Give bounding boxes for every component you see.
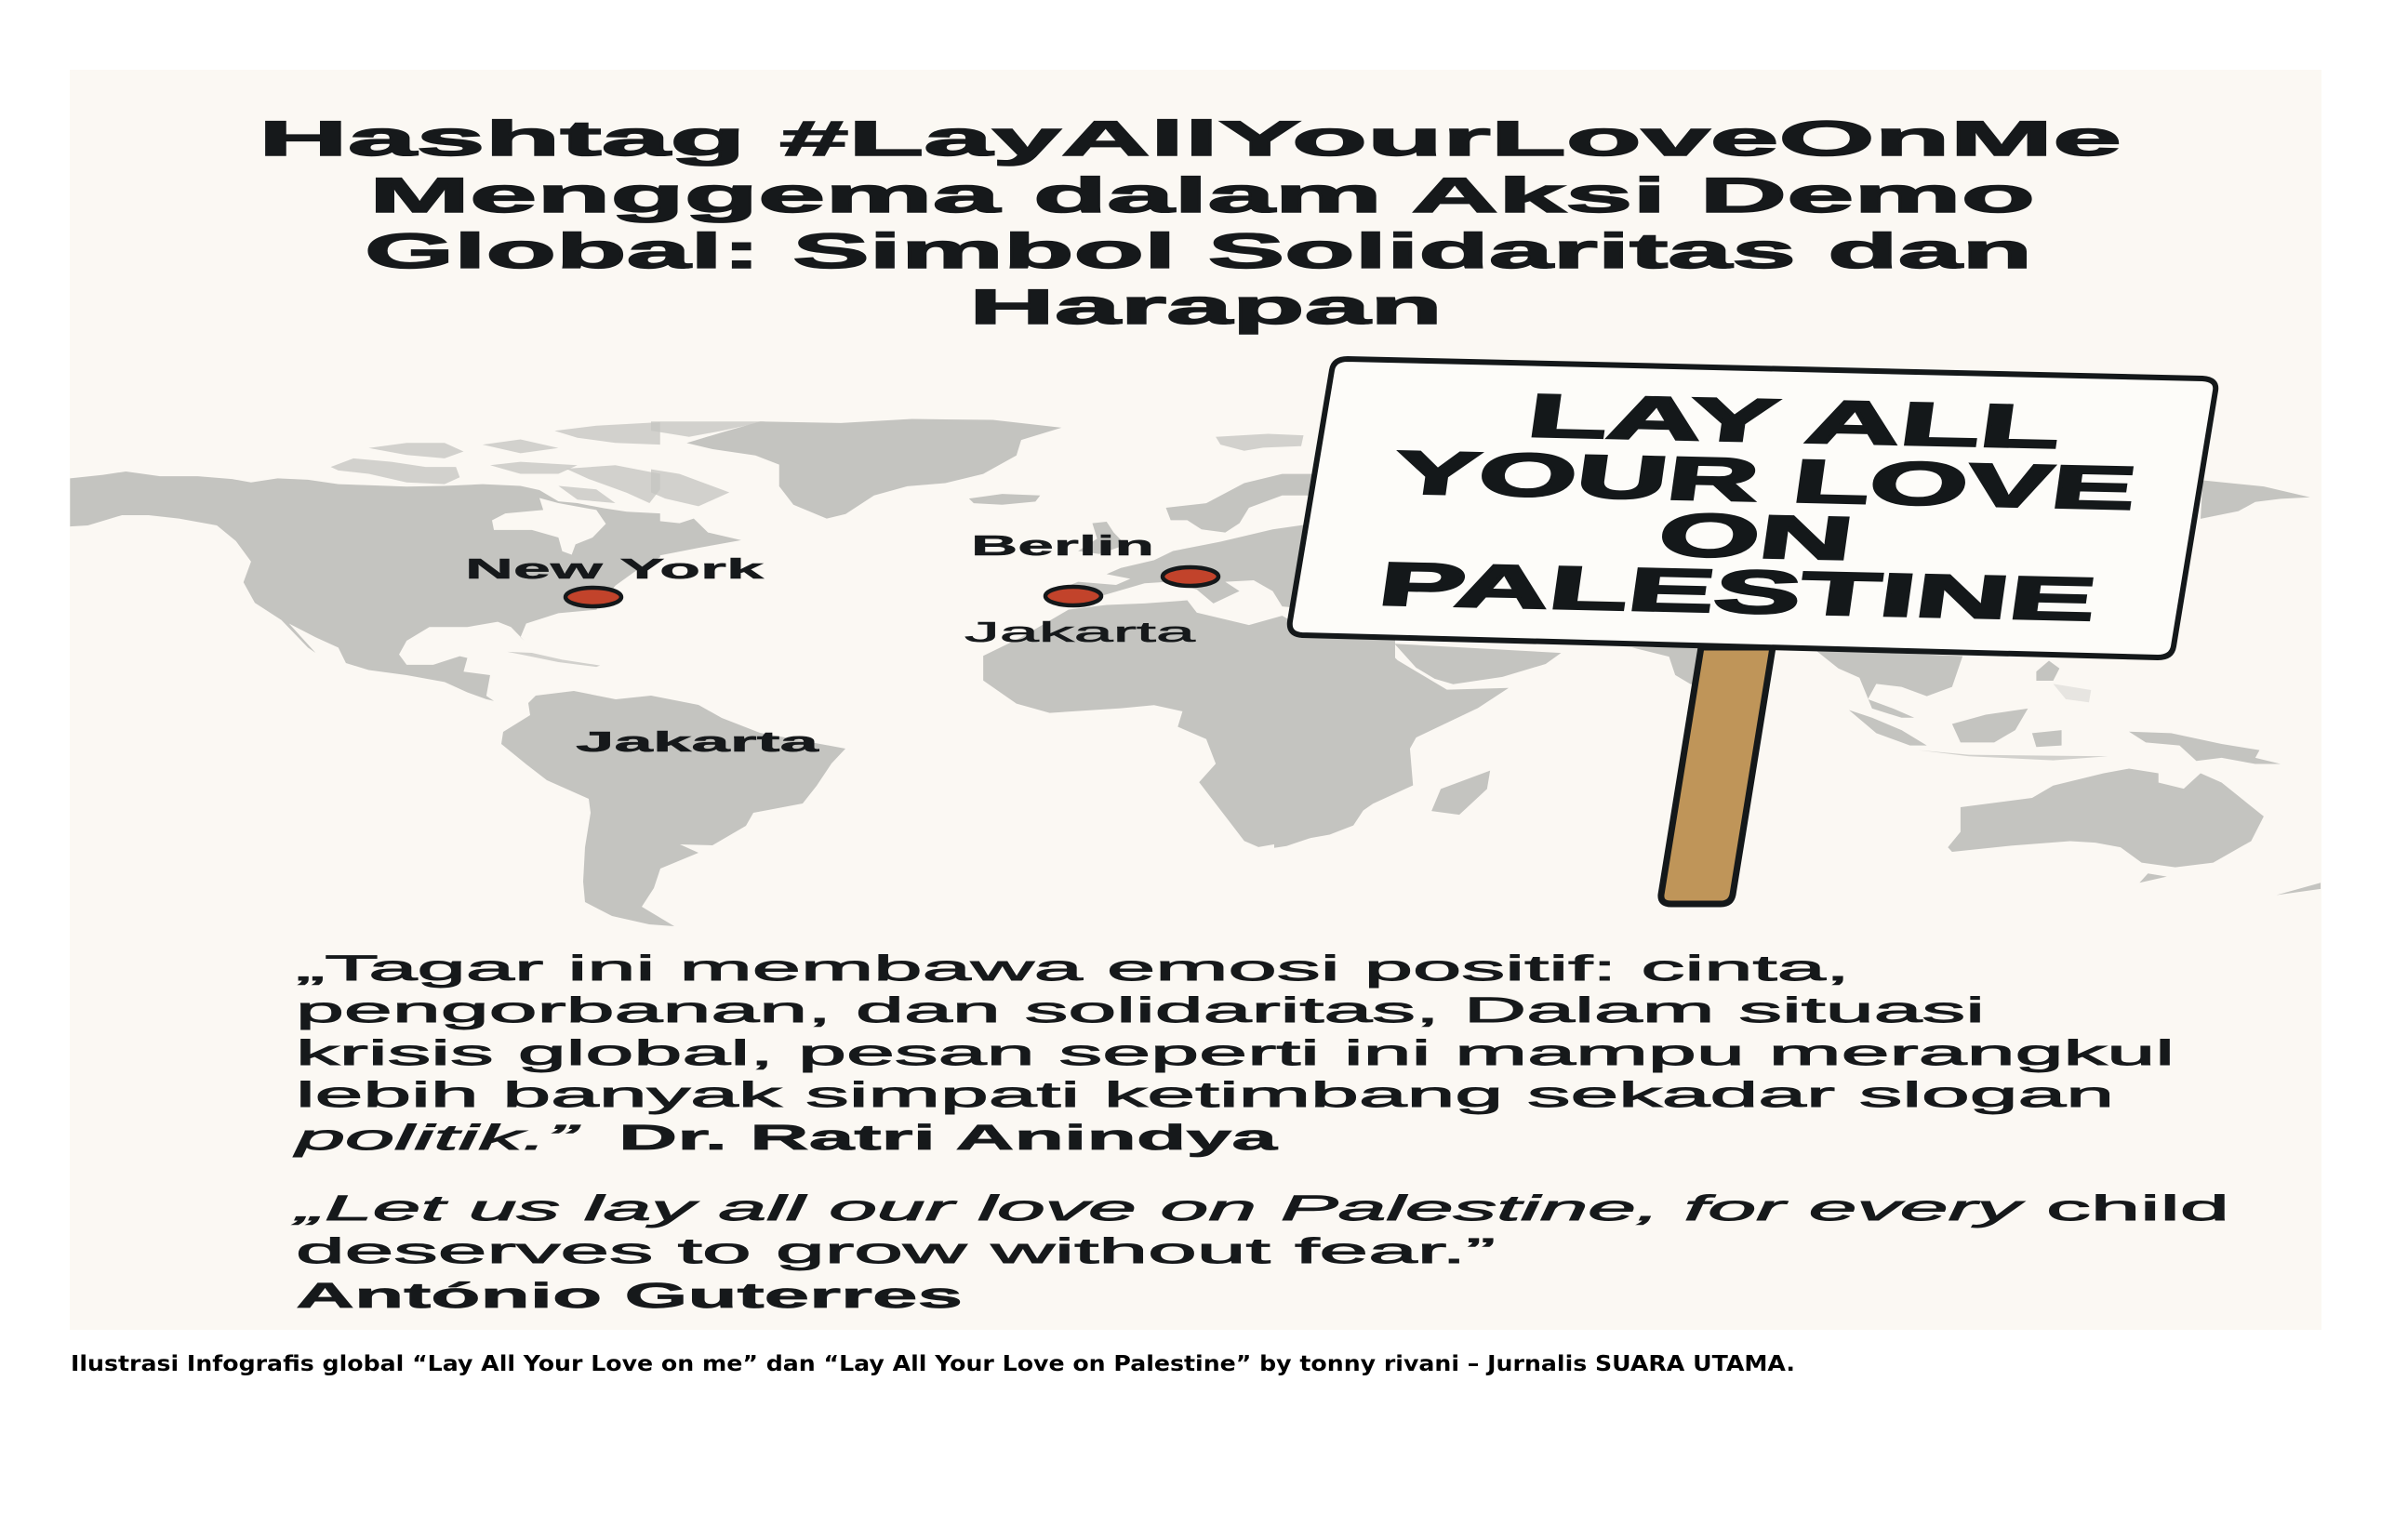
quote: António Guterres: deserves to grow without fear.” [296, 1232, 1496, 1271]
map: North America west [70, 422, 660, 701]
quote: Dr. Ratri Anindya: politik.” [293, 1119, 582, 1158]
label: Jakarta (Africa): Jakarta [964, 616, 1197, 648]
city marker: New York [565, 588, 621, 606]
placard text: ON [1655, 500, 1857, 573]
placard text: LAY ALL [1523, 381, 2065, 461]
label: Berlin: Berlin [971, 529, 1154, 562]
caption: Ilustrasi Infografis global “Lay All Your Love on me” dan “Lay All Your Love on Palestine” by tonny rivani – Jurnalis SUARA UTAMA. [71, 1352, 1795, 1376]
quote: Dr. Ratri Anindya: Dr. Ratri Anindya [619, 1119, 1279, 1158]
quote: António Guterres: child [2046, 1189, 2229, 1228]
quote: Dr. Ratri Anindya: krisis global, pesan seperti ini mampu merangkul [296, 1034, 2175, 1073]
quote: Dr. Ratri Anindya [293, 949, 2175, 1158]
placard post [1661, 647, 1773, 904]
title: Harapan [969, 280, 1443, 335]
world map [70, 419, 2321, 926]
quote: António Guterres [291, 1189, 2229, 1316]
quote: Dr. Ratri Anindya: „Tagar ini membawa emosi positif: cinta, [296, 949, 1850, 989]
map: North Atlantic, Europe and West Africa [651, 419, 1395, 847]
title: Menggema dalam Aksi Demo [369, 168, 2035, 223]
placard text: YOUR LOVE [1390, 438, 2140, 522]
city marker: central Europe [1163, 567, 1218, 586]
placard text: PALESTINE [1375, 550, 2100, 633]
quote: António Guterres: „Let us lay all our love on Palestine, for every [291, 1189, 2025, 1228]
quote: Dr. Ratri Anindya: lebih banyak simpati ketimbang sekadar slogan [296, 1076, 2114, 1115]
city marker: west Mediterranean [1045, 587, 1101, 605]
map: South America [501, 691, 845, 926]
map: Southeast Asia, Australia and Far East [1816, 480, 2321, 895]
panel: background [70, 70, 2321, 1330]
title [259, 112, 2122, 335]
placard board [1290, 359, 2215, 657]
quote: Dr. Ratri Anindya: pengorbanan, dan solidaritas, Dalam situasi [296, 991, 1985, 1030]
quote: António Guterres: António Guterres [296, 1277, 963, 1316]
placard [1290, 359, 2215, 904]
label: Jakarta (South America): Jakarta [576, 725, 820, 758]
map: East Africa, Arabia and India [1274, 634, 1706, 848]
label: New York: New York [465, 552, 765, 585]
placard text [1375, 381, 2140, 633]
title: Hashtag #LayAllYourLoveOnMe [259, 112, 2122, 166]
title: Global: Simbol Solidaritas dan [365, 224, 2032, 279]
